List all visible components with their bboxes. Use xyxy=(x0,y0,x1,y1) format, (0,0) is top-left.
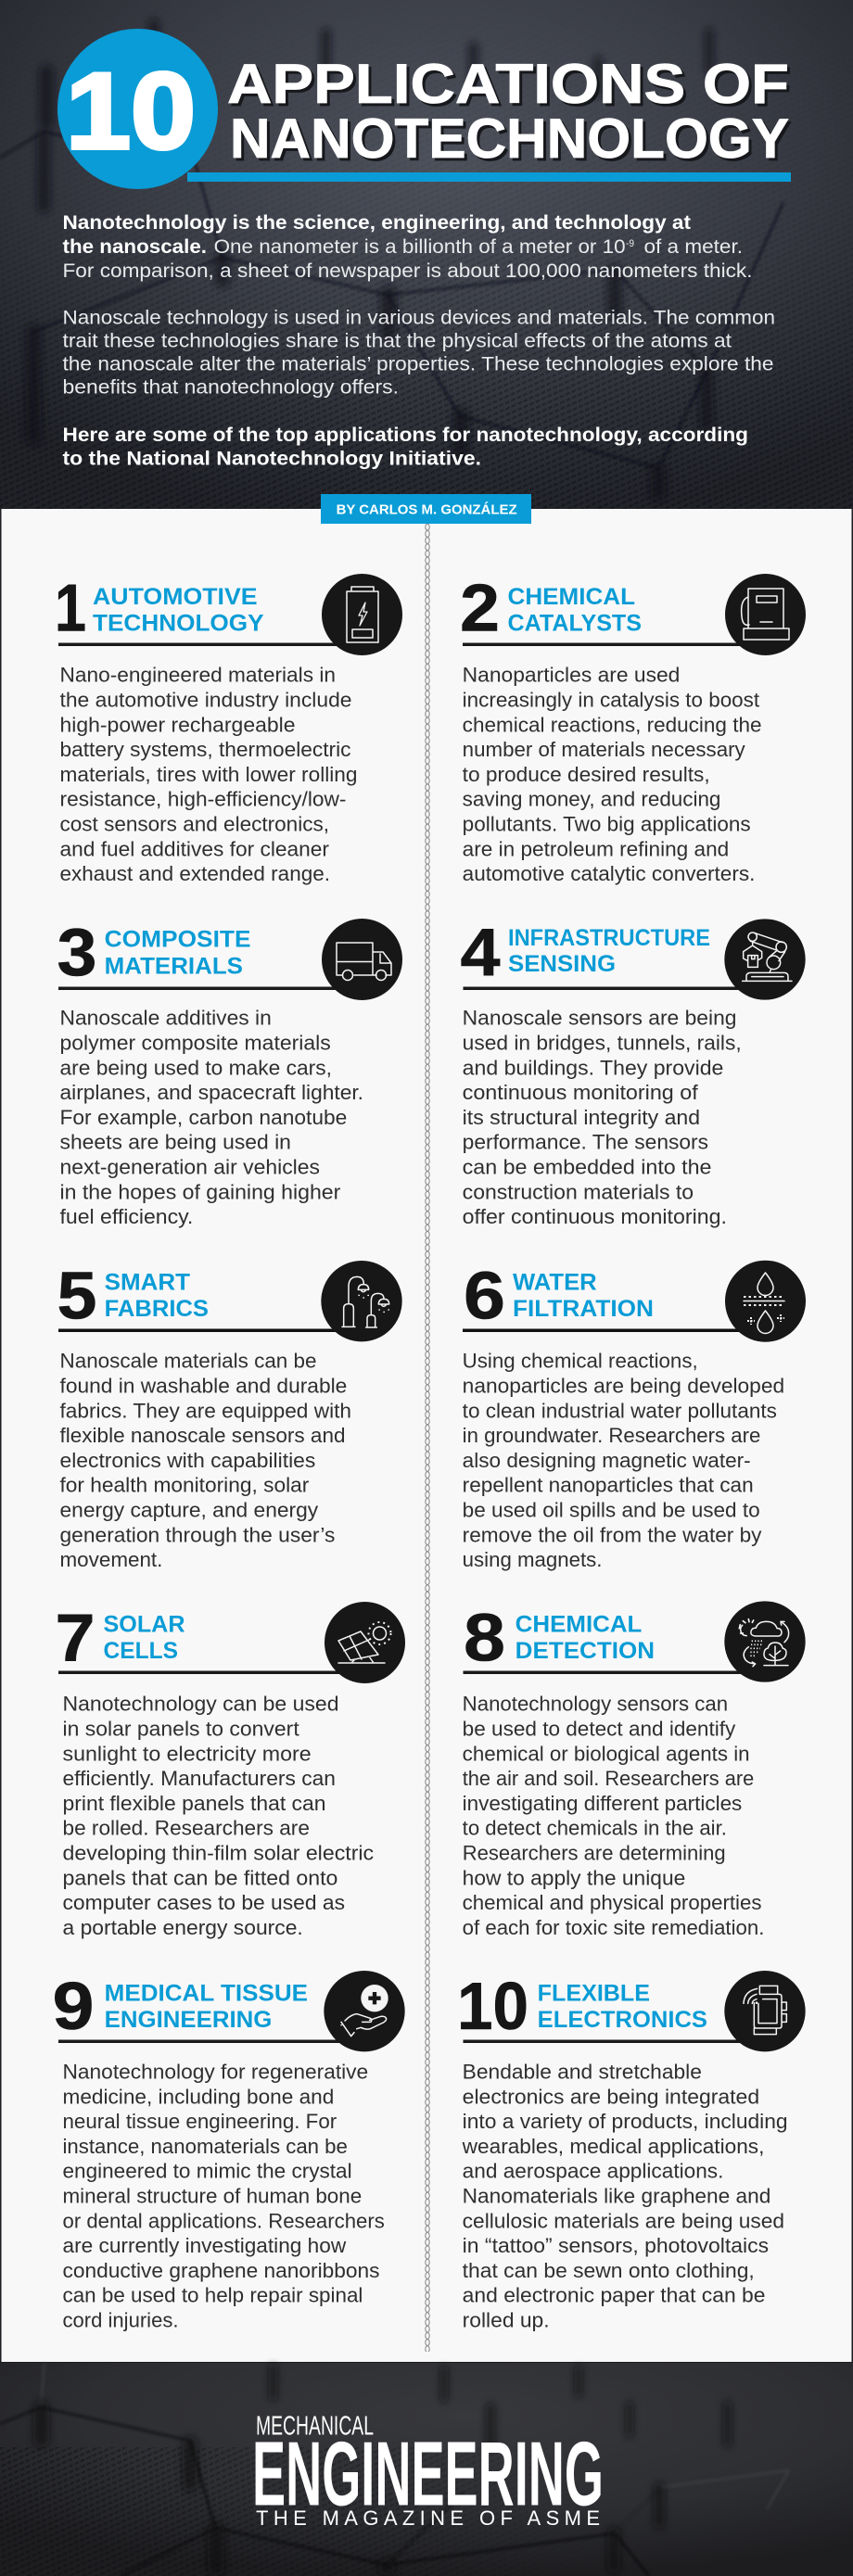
heading: SMART xyxy=(105,1270,190,1296)
body text: can be embedded into the xyxy=(463,1155,712,1179)
heading xyxy=(460,916,744,990)
heading: INFRASTRUCTURE xyxy=(508,925,710,951)
heading: COMPOSITE xyxy=(105,927,250,953)
body text: Nanoparticles are used xyxy=(463,664,680,687)
intro text: Here are some of the top applications for nanotechnology, according xyxy=(63,425,748,446)
heading: DETECTION xyxy=(516,1638,655,1664)
body text: mineral structure of human bone xyxy=(63,2184,362,2208)
title: APPLICATIONS OF xyxy=(227,53,789,115)
body text: for health monitoring, solar xyxy=(59,1474,309,1497)
intro text: of a meter. xyxy=(643,236,743,258)
heading: 10 xyxy=(457,1970,528,2044)
body text xyxy=(463,1007,742,1228)
body text: next-generation air vehicles xyxy=(59,1155,320,1179)
heading: AUTOMOTIVE xyxy=(93,584,258,610)
body text: generation through the user’s xyxy=(59,1523,335,1546)
body text xyxy=(63,2060,385,2332)
body text: pollutants. Two big applications xyxy=(463,812,751,836)
body text: be rolled. Researchers are xyxy=(63,1817,310,1840)
column divider chain xyxy=(423,524,432,2352)
intro text: to the National Nanotechnology Initiative. xyxy=(63,449,481,469)
body text: sunlight to electricity more xyxy=(63,1742,312,1765)
heading xyxy=(56,1602,344,1676)
byline: BY CARLOS M. GONZÁLEZ xyxy=(337,502,517,517)
body text: flexible nanoscale sensors and xyxy=(59,1424,345,1447)
icon: battery xyxy=(322,574,402,655)
body text: construction materials to xyxy=(463,1180,694,1203)
body text: be used oil spills and be used to xyxy=(463,1498,760,1522)
body text xyxy=(59,664,358,885)
body text: movement. xyxy=(59,1548,162,1571)
intro text: benefits that nanotechnology offers. xyxy=(63,376,399,399)
intro text: trait these technologies share is that the physical effects of the atoms at xyxy=(63,330,732,352)
heading: TECHNOLOGY xyxy=(93,611,264,637)
body text: performance. The sensors xyxy=(463,1131,708,1154)
heading: CHEMICAL xyxy=(508,584,635,610)
body text: neural tissue engineering. For xyxy=(63,2110,337,2133)
content panel xyxy=(2,509,851,2362)
icon: solar panels xyxy=(325,1602,405,1683)
body text: developing thin-film solar electric xyxy=(63,1841,374,1865)
logo: Mechanical Engineering xyxy=(252,2412,604,2530)
icon: street lamps xyxy=(321,1261,402,1341)
heading: FILTRATION xyxy=(513,1296,654,1322)
heading: MATERIALS xyxy=(105,954,243,980)
heading: ENGINEERING xyxy=(105,2007,272,2033)
body text: battery systems, thermoelectric xyxy=(59,738,350,761)
body text: be used to detect and identify xyxy=(463,1717,735,1741)
heading: SENSING xyxy=(508,951,616,977)
heading xyxy=(464,1602,744,1676)
body text: and buildings. They provide xyxy=(463,1056,723,1079)
body text: Nanoscale sensors are being xyxy=(463,1007,736,1030)
heading xyxy=(463,1259,744,1333)
body text: automotive catalytic converters. xyxy=(463,862,755,885)
heading: 4 xyxy=(460,916,501,990)
body text: energy capture, and energy xyxy=(59,1498,318,1522)
body text: in solar panels to convert xyxy=(63,1717,299,1741)
panel: 2 chemical catalysts xyxy=(460,572,806,885)
heading xyxy=(460,572,744,646)
heading: CHEMICAL xyxy=(516,1612,642,1638)
body text: Using chemical reactions, xyxy=(463,1350,698,1373)
body text: conductive graphene nanoribbons xyxy=(63,2259,379,2282)
body text: Nanotechnology for regenerative xyxy=(63,2060,368,2084)
body text xyxy=(463,664,762,885)
icon: smart watch xyxy=(724,1971,806,2051)
heading xyxy=(55,572,341,646)
heading: 8 xyxy=(464,1602,505,1676)
intro text: For comparison, a sheet of newspaper is about 100,000 nanometers thick. xyxy=(63,260,753,282)
heading: 6 xyxy=(464,1259,505,1333)
intro text xyxy=(63,212,775,469)
body text xyxy=(463,1693,764,1939)
title: NANOTECHNOLOGY xyxy=(230,108,789,170)
body text: or dental applications. Researchers xyxy=(63,2209,385,2232)
body text: also designing magnetic water- xyxy=(463,1449,751,1472)
heading: CELLS xyxy=(104,1638,178,1664)
body text: high-power rechargeable xyxy=(59,713,295,736)
intro text: One nanometer is a billionth of a meter or 10 xyxy=(214,236,626,258)
panel: 3 composite materials xyxy=(57,916,402,1228)
body text: remove the oil from the water by xyxy=(463,1523,762,1546)
body text: print flexible panels that can xyxy=(63,1792,326,1815)
body text: the automotive industry include xyxy=(59,688,352,712)
body text: are being used to make cars, xyxy=(59,1056,332,1079)
heading: 5 xyxy=(57,1259,96,1333)
heading: FABRICS xyxy=(105,1296,209,1322)
body text: in the hopes of gaining higher xyxy=(59,1180,340,1203)
body text: medicine, including bone and xyxy=(63,2085,334,2108)
body text: nanoparticles are being developed xyxy=(463,1374,784,1398)
body text: continuous monitoring of xyxy=(463,1081,699,1104)
footer background xyxy=(0,2363,853,2576)
body text: computer cases to be used as xyxy=(63,1891,345,1914)
body text: rolled up. xyxy=(463,2308,550,2332)
body text: to detect chemicals in the air. xyxy=(463,1817,727,1840)
body text: electronics are being integrated xyxy=(463,2085,759,2108)
body text: exhaust and extended range. xyxy=(59,862,330,885)
body text: cellulosic materials are being used xyxy=(463,2209,784,2232)
body text: Nanoscale materials can be xyxy=(59,1350,317,1373)
icon: fuel pump xyxy=(725,574,806,655)
intro text: Nanotechnology is the science, engineering, and technology at xyxy=(63,212,691,234)
body text xyxy=(462,2060,788,2332)
body text: wearables, medical applications, xyxy=(462,2135,764,2158)
byline xyxy=(321,494,531,524)
body text: found in washable and durable xyxy=(59,1374,347,1398)
body text: in groundwater. Researchers are xyxy=(463,1424,760,1447)
title underline xyxy=(187,172,791,182)
body text: using magnets. xyxy=(463,1548,603,1571)
body text: increasingly in catalysis to boost xyxy=(463,688,759,712)
body text: the air and soil. Researchers are xyxy=(463,1767,754,1790)
heading: 7 xyxy=(56,1602,95,1676)
body text: instance, nanomaterials can be xyxy=(63,2135,348,2158)
icon: weather and tree xyxy=(724,1601,806,1682)
heading xyxy=(57,1259,341,1333)
intro text: Nanoscale technology is used in various devices and materials. The common xyxy=(63,308,775,328)
body text xyxy=(463,1350,784,1571)
body text: fuel efficiency. xyxy=(59,1205,193,1228)
body text: sheets are being used in xyxy=(59,1131,291,1154)
panel: 6 water filtration xyxy=(463,1259,806,1571)
heading: 3 xyxy=(57,916,96,990)
body text: how to apply the unique xyxy=(463,1866,685,1889)
heading: 1 xyxy=(55,572,86,646)
body text: Nanotechnology sensors can xyxy=(463,1693,728,1716)
body text: and aerospace applications. xyxy=(463,2160,723,2183)
header background xyxy=(0,0,853,519)
body text: in “tattoo” sensors, photovoltaics xyxy=(463,2234,769,2257)
body text: cost sensors and electronics, xyxy=(59,812,329,836)
heading: 9 xyxy=(52,1970,95,2044)
body text: airplanes, and spacecraft lighter. xyxy=(59,1081,363,1104)
body text: its structural integrity and xyxy=(463,1106,700,1129)
panel: 5 smart fabrics xyxy=(57,1259,402,1571)
body text: engineered to mimic the crystal xyxy=(63,2160,352,2183)
body text: Nano-engineered materials in xyxy=(59,664,336,687)
icon: robotic arm xyxy=(724,919,806,1000)
intro text: the nanoscale. xyxy=(63,236,207,258)
heading: CATALYSTS xyxy=(508,611,642,637)
body text: used in bridges, tunnels, rails, xyxy=(463,1031,742,1055)
intro text: -9 xyxy=(626,238,634,249)
panel: 10 flexible electronics xyxy=(457,1970,806,2332)
heading: SOLAR xyxy=(104,1612,185,1638)
heading xyxy=(52,1970,341,2044)
title badge: 10 xyxy=(57,29,218,189)
body text: Researchers are determining xyxy=(463,1841,726,1865)
body text: electronics with capabilities xyxy=(59,1449,315,1472)
panel: 1 automotive technology xyxy=(55,572,402,885)
body text: Nanomaterials like graphene and xyxy=(463,2184,770,2208)
title xyxy=(227,53,789,170)
panel: 4 infrastructure sensing xyxy=(460,916,806,1228)
body text: materials, tires with lower rolling xyxy=(59,763,358,786)
body text: chemical reactions, reducing the xyxy=(463,713,762,736)
title badge: 10: 10 xyxy=(66,50,196,171)
body text: investigating different particles xyxy=(463,1792,742,1815)
logo: Mechanical Engineering: MECHANICAL xyxy=(256,2412,374,2442)
body text: to clean industrial water pollutants xyxy=(463,1399,777,1422)
body text: to produce desired results, xyxy=(463,763,710,786)
heading xyxy=(57,916,341,990)
body text: can be used to help repair spinal xyxy=(63,2284,363,2307)
icon: water filter xyxy=(725,1261,806,1342)
heading: MEDICAL TISSUE xyxy=(105,1981,308,2007)
body text: are currently investigating how xyxy=(63,2234,346,2257)
body text: efficiently. Manufacturers can xyxy=(63,1767,336,1790)
heading xyxy=(457,1970,744,2044)
body text xyxy=(59,1350,351,1571)
body text: Nanoscale additives in xyxy=(59,1007,272,1030)
body text: of each for toxic site remediation. xyxy=(463,1916,764,1939)
body text: panels that can be fitted onto xyxy=(63,1866,337,1889)
body text: are in petroleum refining and xyxy=(463,837,729,860)
body text: cord injuries. xyxy=(63,2308,178,2332)
body text: and electronic paper that can be xyxy=(463,2284,766,2307)
body text: offer continuous monitoring. xyxy=(463,1205,727,1228)
body text: saving money, and reducing xyxy=(463,788,720,811)
panel: 9 medical tissue engineering xyxy=(52,1970,405,2332)
intro text: the nanoscale alter the materials’ properties. These technologies explore the xyxy=(63,354,773,374)
panel: 7 solar cells xyxy=(56,1602,405,1939)
icon: hand with medical cross xyxy=(324,1971,405,2051)
body text: and fuel additives for cleaner xyxy=(59,837,329,860)
body text xyxy=(63,1693,374,1939)
body text: polymer composite materials xyxy=(59,1031,331,1055)
logo: Mechanical Engineering: THE MAGAZINE OF ASME xyxy=(256,2506,600,2530)
body text xyxy=(59,1007,363,1228)
heading: 2 xyxy=(460,572,500,646)
heading: WATER xyxy=(513,1270,597,1296)
body text: chemical or biological agents in xyxy=(463,1742,750,1765)
body text: fabrics. They are equipped with xyxy=(59,1399,351,1422)
body text: into a variety of products, including xyxy=(463,2110,788,2133)
body text: chemical and physical properties xyxy=(463,1891,762,1914)
heading: ELECTRONICS xyxy=(538,2007,707,2033)
body text: For example, carbon nanotube xyxy=(59,1106,347,1129)
icon: truck xyxy=(322,919,402,1000)
panel: 8 chemical detection xyxy=(463,1601,806,1939)
body text: Nanotechnology can be used xyxy=(63,1693,339,1716)
body text: a portable energy source. xyxy=(63,1916,303,1939)
heading: FLEXIBLE xyxy=(538,1981,650,2007)
body text: Bendable and stretchable xyxy=(463,2060,702,2084)
body text: number of materials necessary xyxy=(463,738,745,761)
body text: that can be sewn onto clothing, xyxy=(463,2259,755,2282)
body text: repellent nanoparticles that can xyxy=(463,1474,754,1497)
body text: resistance, high-efficiency/low- xyxy=(59,788,347,811)
